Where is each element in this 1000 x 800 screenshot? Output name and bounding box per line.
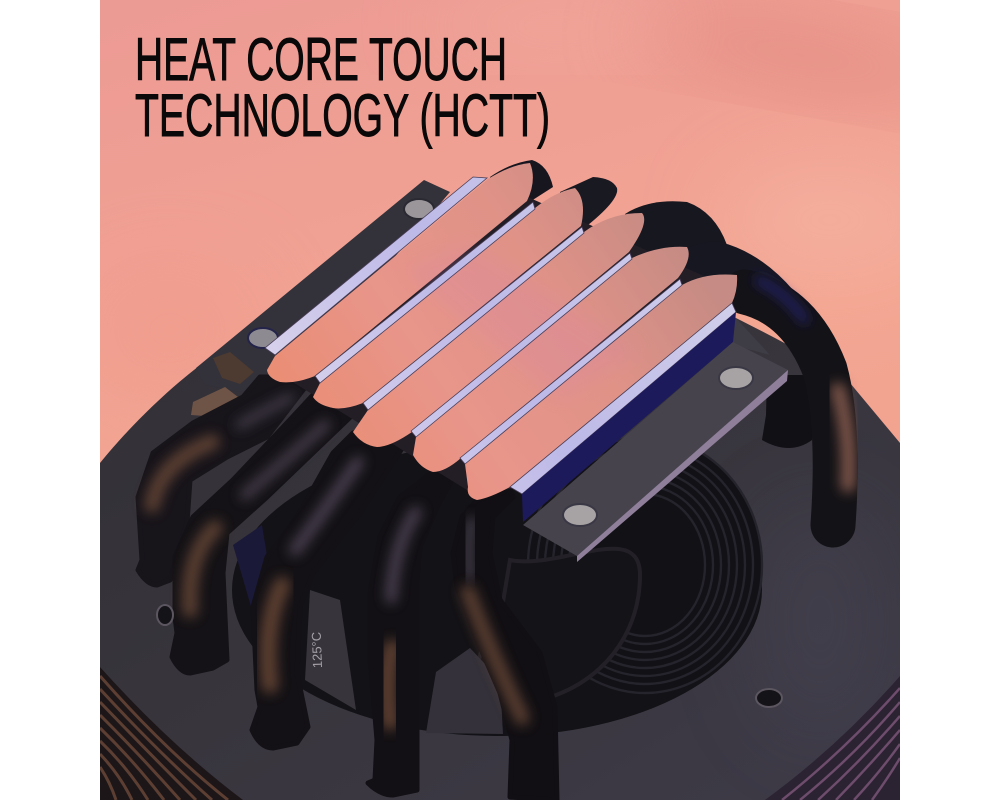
small screw right [756,689,782,707]
tan tab [191,387,238,416]
purple reflection on copper [420,244,617,384]
small screw left [157,605,173,625]
front mounting plate [522,312,788,562]
rear mounting plate [191,180,450,416]
title line 2: TECHNOLOGY (HCTT) [135,82,550,149]
product photo [100,0,900,800]
rear heatpipes [490,160,849,525]
plate front edge [577,370,788,562]
pipe 1 [138,377,313,585]
stacked fins bottom right [765,676,900,800]
rear pipe 5 [745,292,835,525]
tan reflection [213,352,254,384]
screw hole front right [719,367,753,389]
temperature marking: 125°C [309,632,325,668]
dark backing under strips [293,198,704,490]
infographic canvas [100,0,900,800]
rear pipe 1 [490,160,553,203]
pink background [100,0,900,463]
plate shadow triangle [734,318,768,354]
stacked fins bottom left [100,667,243,800]
silver separators [265,177,736,494]
screw hole rear top [404,199,434,219]
screw hole front bottom [563,504,597,526]
heatsink base disc [100,300,900,800]
plate top [523,342,788,556]
brown highlight rear pipe 5 [838,390,849,485]
blue blades left [233,525,266,606]
rear pipe 3 [625,201,727,252]
copper contact strips [267,163,737,500]
grey blade centre [426,648,503,734]
title [135,26,550,149]
rear pipe 2 [560,177,617,229]
rear vertical pipe [762,375,812,448]
pipe 4 [366,504,425,798]
central fan recess [232,437,762,736]
title line 1: HEAT CORE TOUCH [135,26,507,93]
pipe 2 [172,395,363,673]
radial fins [528,437,762,693]
central hub [478,549,640,705]
screw hole rear left [248,328,278,348]
front heatpipes [138,377,557,800]
grey blade left [305,590,356,710]
blue highlight rear pipe 5 [758,280,805,320]
pipe 5 [453,490,557,800]
rear pipe 4 [684,244,792,288]
blue channel [522,312,736,522]
pipe 3 [252,433,412,748]
